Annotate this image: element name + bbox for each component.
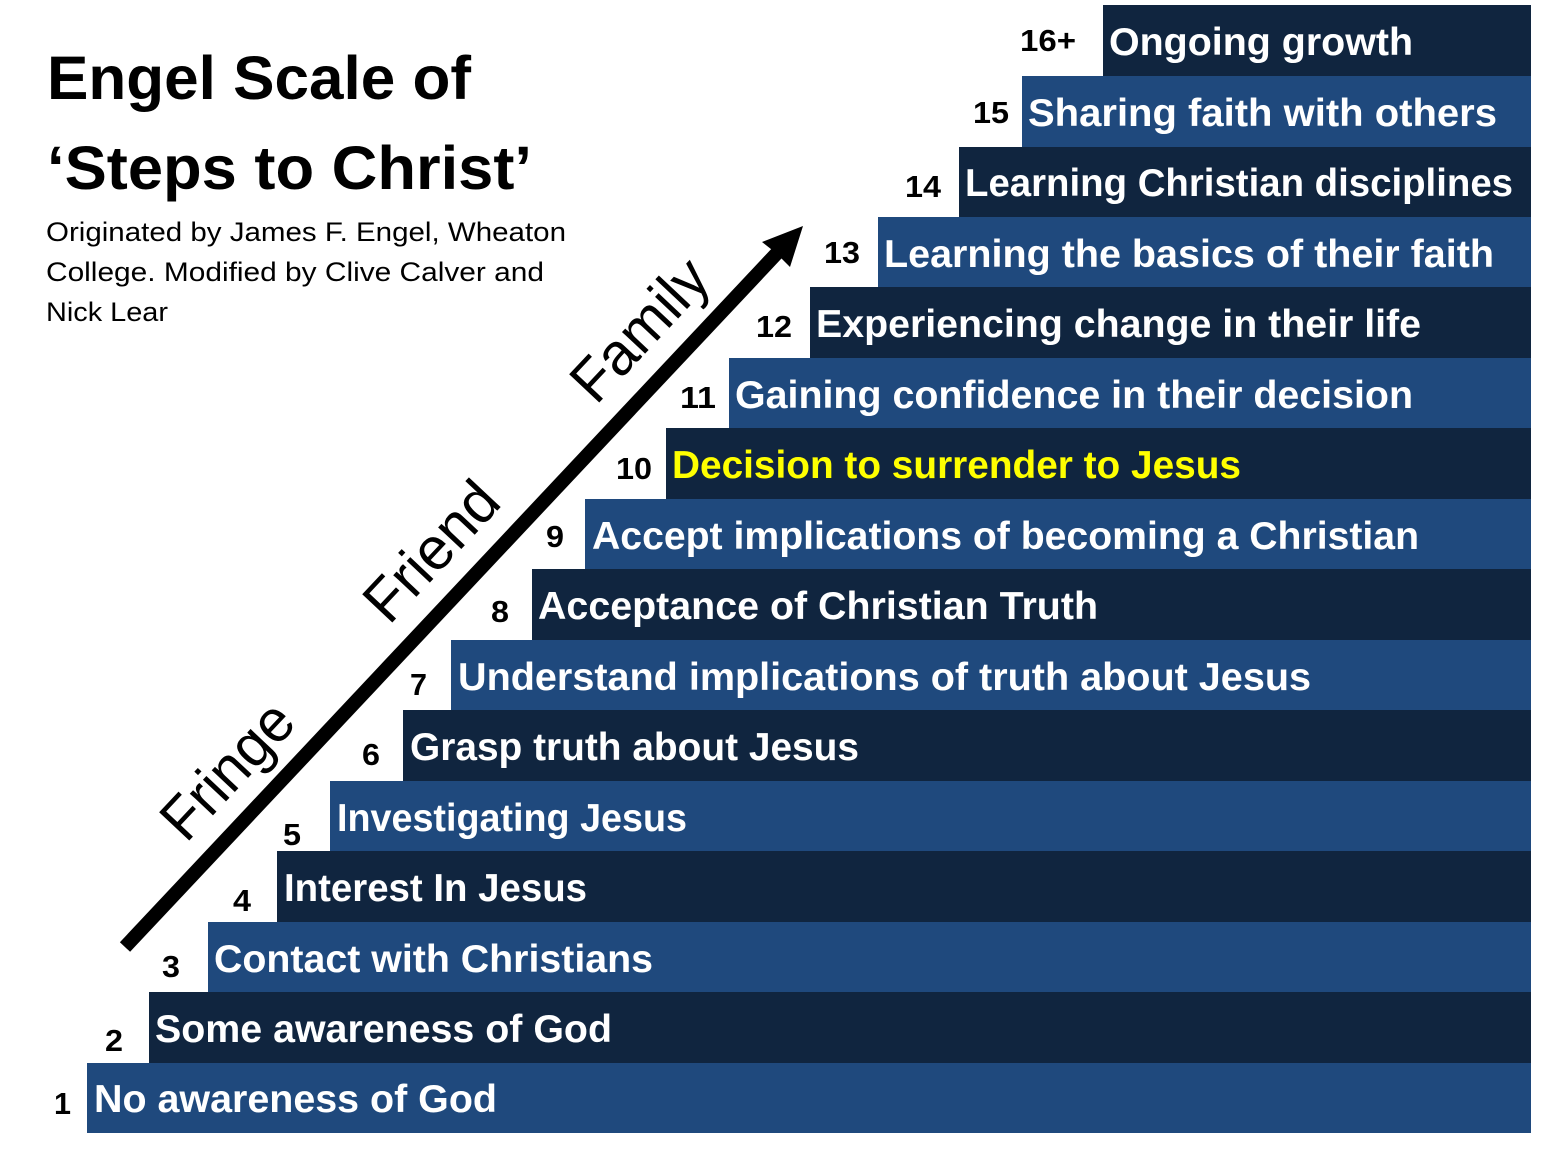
subtitle text block: College. Modified by Clive Calver and [46,257,544,287]
step 4 [233,851,1531,922]
step 13: Learning the basics of their faith [884,233,1494,276]
step 8 [491,569,1531,640]
step 12 [756,287,1531,358]
subtitle text block: Originated by James F. Engel, Wheaton [46,217,566,247]
step 1: No awareness of God [94,1078,497,1121]
step 11: 11 [680,380,716,415]
subtitle text block [46,217,566,327]
step 3: Contact with Christians [214,938,653,981]
step 14: Learning Christian disciplines [965,162,1513,205]
step 15 [973,76,1531,147]
label: Friend: Friend [350,467,513,635]
label: Family: Family [557,244,723,415]
step 15: 15 [973,95,1009,130]
step 9: Accept implications of becoming a Christian [592,515,1419,558]
step 9: 9 [546,519,564,554]
step 1 [54,1063,1531,1133]
step 7 [410,640,1531,710]
step 10: 10 [616,451,652,486]
step 16+: Ongoing growth [1109,21,1413,64]
title: Engel Scale of [47,44,472,112]
step 6: Grasp truth about Jesus [410,726,859,769]
step 12: 12 [756,309,792,344]
step 2: 2 [105,1023,123,1058]
subtitle text block: Nick Lear [46,297,168,327]
step 7: 7 [410,667,427,702]
step 11 [680,358,1531,428]
step 8: Acceptance of Christian Truth [538,585,1098,628]
step 5: Investigating Jesus [337,797,687,840]
step 9 [546,499,1531,569]
title [47,44,532,202]
step 13: 13 [824,235,860,270]
step 7: Understand implications of truth about Jesus [458,656,1311,699]
step 13 [824,217,1531,287]
step 2: Some awareness of God [155,1008,612,1051]
step 4: 4 [233,883,252,918]
step 16+: 16+ [1020,23,1076,58]
step 5 [283,781,1531,852]
step 15: Sharing faith with others [1028,92,1497,135]
step 6 [362,710,1531,781]
step 8: 8 [491,594,509,629]
step 11: Gaining confidence in their decision [735,374,1413,417]
step 14 [905,147,1531,217]
arrow [125,226,803,947]
title: ‘Steps to Christ’ [47,134,532,202]
step 10 [616,428,1531,499]
step 2 [105,992,1531,1063]
step 16+ [1020,5,1531,76]
step 3: 3 [162,949,180,984]
step 12: Experiencing change in their life [816,303,1421,346]
step 14: 14 [905,169,942,204]
label: Fringe: Fringe [147,687,308,853]
step 5: 5 [283,817,301,852]
step 3 [162,922,1531,992]
step 1: 1 [54,1086,71,1121]
step 10: Decision to surrender to Jesus [672,444,1241,487]
step 6: 6 [362,737,380,772]
step 4: Interest In Jesus [284,867,587,910]
